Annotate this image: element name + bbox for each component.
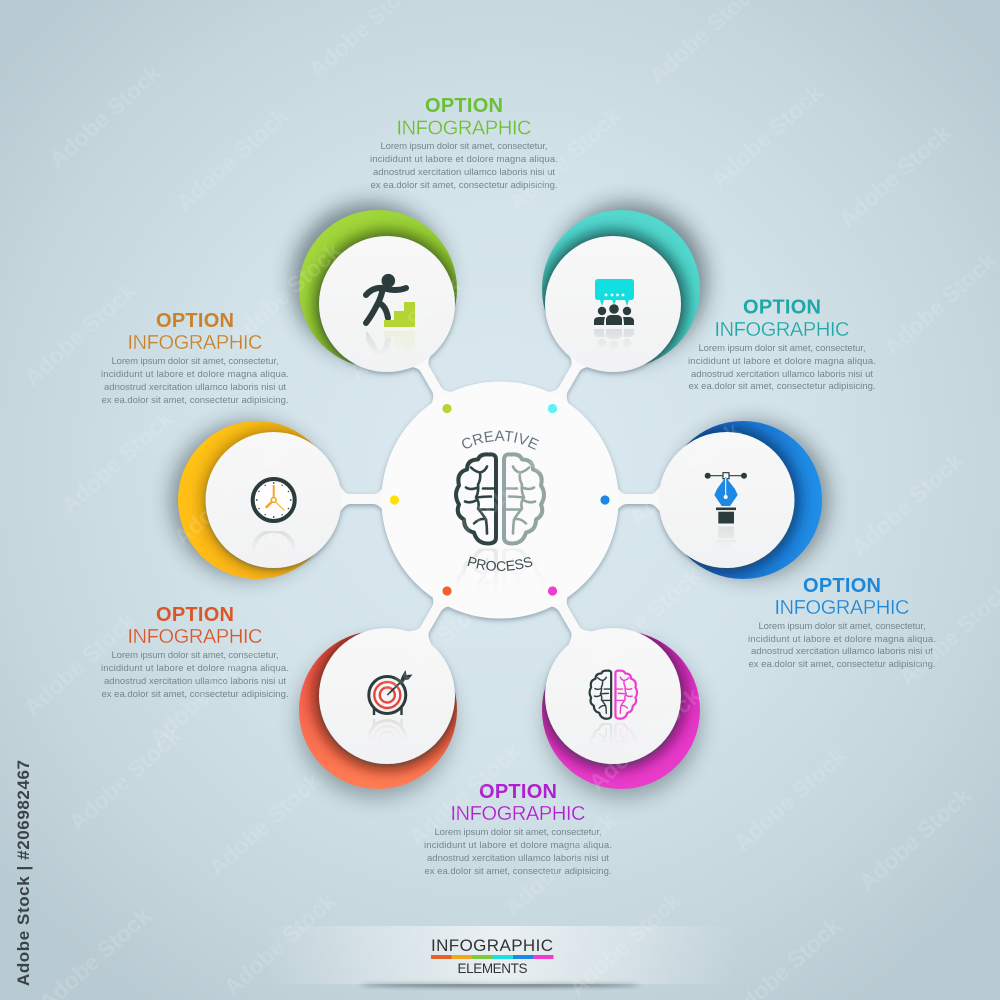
text: Adobe Stock — [56, 405, 178, 519]
text: Adobe Stock — [169, 437, 291, 551]
text block: top green: Lorem ipsum dolor sit amet, consectetur, — [380, 141, 548, 152]
text block: upper right teal: incididunt ut labore et dolore magna aliqua. — [688, 356, 876, 367]
text block: lower right blue — [748, 575, 936, 670]
text: Adobe Stock — [224, 237, 346, 351]
text: Adobe Stock — [846, 447, 968, 561]
text: Adobe Stock — [454, 427, 576, 541]
text: Adobe Stock — [44, 59, 166, 173]
ring: right blue — [652, 421, 829, 579]
footer banner — [265, 926, 735, 987]
text: Adobe Stock — [834, 119, 956, 233]
disc: left — [206, 432, 342, 568]
text: Adobe Stock — [584, 682, 706, 796]
text block: upper right teal — [688, 296, 876, 392]
text block: lower left red-orange — [101, 604, 289, 700]
text: Adobe Stock — [19, 277, 141, 391]
disc: top-left — [319, 236, 455, 372]
disc: right — [658, 432, 794, 568]
ring: top-right teal — [539, 203, 707, 378]
text block: upper right teal: adnostrud xercitation ullamco laboris nisi ut — [691, 369, 873, 380]
ring: left yellow — [171, 421, 346, 579]
text: Adobe Stock — [404, 737, 526, 851]
text block: lower right blue: incididunt ut labore et dolore magna aliqua. — [748, 634, 936, 645]
icon: small two-tone brain — [588, 670, 638, 738]
text block: upper right teal: OPTION — [743, 296, 821, 318]
text block: top green: INFOGRAPHIC — [396, 118, 532, 140]
icon: pen tool nib — [704, 472, 747, 542]
text block: lower left red-orange: INFOGRAPHIC — [128, 626, 262, 648]
text block: upper left orange — [101, 310, 289, 406]
text block: lower left red-orange: adnostrud xercitation ullamco laboris nisi ut — [104, 676, 286, 687]
text block: lower left red-orange: Lorem ipsum dolor sit amet, consectetur, — [112, 650, 278, 661]
text: Adobe Stock — [706, 79, 828, 193]
text block: lower right blue: adnostrud xercitation ullamco laboris nisi ut — [751, 646, 933, 657]
text: Adobe Stock — [729, 742, 851, 856]
text block: lower right blue: OPTION — [803, 575, 881, 597]
text block: upper left orange: Lorem ipsum dolor sit amet, consectetur, — [112, 356, 278, 367]
text block: upper left orange: INFOGRAPHIC — [128, 332, 262, 354]
text: Adobe Stock — [374, 587, 496, 701]
hub label: process: PROCESS — [468, 556, 532, 572]
text block: upper left orange: ex ea.dolor sit amet, consectetur adipisicing. — [102, 395, 288, 406]
stock id side text: Adobe Stock | #206982467 — [14, 760, 33, 986]
hub colour dots — [390, 404, 610, 596]
icon: clock — [250, 477, 297, 545]
text block: top green: OPTION — [425, 95, 503, 117]
white network: hub, connectors and option discs — [206, 236, 794, 764]
text: Adobe Stock — [499, 807, 621, 921]
icon: target with arrow — [367, 670, 412, 733]
text: Adobe Stock — [144, 637, 266, 751]
text: Adobe Stock — [219, 887, 341, 1000]
text block: bottom purple: adnostrud xercitation ullamco laboris nisi ut — [427, 853, 609, 864]
text block: top green: adnostrud xercitation ullamco laboris nisi ut — [373, 167, 555, 178]
text block: bottom purple: Lorem ipsum dolor sit amet, consectetur, — [434, 827, 602, 838]
text block: bottom purple: ex ea.dolor sit amet, consectetur adipisicing. — [424, 866, 612, 877]
text block: upper left orange: OPTION — [156, 310, 234, 332]
ring: top-left green — [292, 203, 461, 378]
text block: upper right teal: ex ea.dolor sit amet, consectetur adipisicing. — [688, 381, 876, 392]
text: Adobe Stock — [344, 272, 466, 386]
central hub disc — [382, 382, 618, 618]
text block: lower right blue: Lorem ipsum dolor sit amet, consectetur, — [758, 621, 926, 632]
text block: lower left red-orange: OPTION — [156, 604, 234, 626]
disc: bottom-left — [319, 628, 455, 764]
text block: lower right blue: ex ea.dolor sit amet, consectetur adipisicing. — [748, 659, 936, 670]
text: Adobe Stock — [624, 417, 746, 531]
text: Adobe Stock — [564, 887, 686, 1000]
text block: top green: ex ea.dolor sit amet, consectetur adipisicing. — [370, 180, 558, 191]
text: Adobe Stock — [879, 247, 1000, 361]
ring: bottom-left red-orange — [298, 622, 461, 798]
disc: bottom-right — [545, 628, 681, 764]
text: Adobe Stock — [854, 782, 976, 896]
text block: bottom purple: INFOGRAPHIC — [450, 803, 586, 825]
text: Adobe Stock — [584, 562, 706, 676]
text block: lower right blue: INFOGRAPHIC — [774, 597, 910, 619]
text block: lower left red-orange: incididunt ut labore et dolore magna aliqua. — [101, 663, 289, 674]
text: Adobe Stock — [19, 607, 141, 721]
disc: top-right — [545, 236, 681, 372]
text block: bottom purple: incididunt ut labore et dolore magna aliqua. — [424, 840, 612, 851]
hub label: creative: CREATIVE — [462, 430, 540, 450]
text block: top green — [370, 95, 558, 191]
text block: lower left red-orange: ex ea.dolor sit amet, consectetur adipisicing. — [102, 689, 288, 700]
text block: upper right teal: INFOGRAPHIC — [714, 319, 850, 341]
text block: upper right teal: Lorem ipsum dolor sit amet, consectetur, — [698, 343, 866, 354]
footer subtitle: ELEMENTS — [458, 961, 528, 976]
icon: team with speech bubble — [594, 279, 634, 344]
footer title: INFOGRAPHIC — [431, 936, 553, 955]
ring: bottom-right magenta — [539, 622, 701, 798]
text: Adobe Stock — [504, 102, 626, 216]
text block: upper left orange: adnostrud xercitation ullamco laboris nisi ut — [104, 382, 286, 393]
text block: bottom purple: OPTION — [479, 781, 557, 803]
text: Adobe Stock — [171, 102, 293, 216]
icon: central brain — [454, 452, 546, 575]
text: Adobe Stock — [204, 767, 326, 881]
text block: upper left orange: incididunt ut labore et dolore magna aliqua. — [101, 369, 289, 380]
icon: runner on stairs — [363, 274, 415, 348]
text block: top green: incididunt ut labore et dolore magna aliqua. — [370, 154, 558, 165]
text block: bottom purple — [424, 781, 612, 877]
footer colour bar — [431, 955, 554, 959]
text: Adobe Stock — [64, 722, 186, 836]
connectors — [340, 354, 660, 644]
